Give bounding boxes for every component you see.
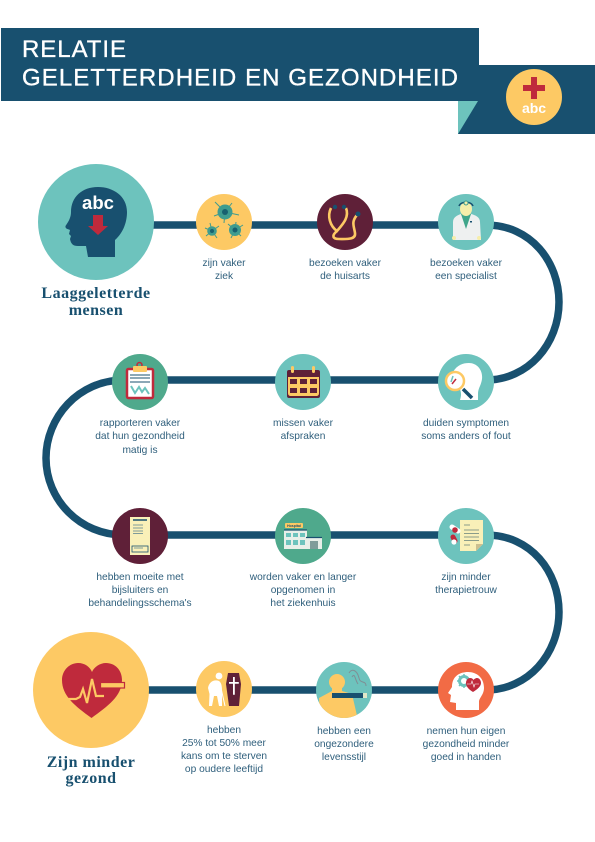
icon: magnifier over head bbox=[438, 354, 494, 410]
step: kans om te sterven bbox=[181, 661, 267, 775]
icon: hospital: Hospital bbox=[287, 524, 301, 528]
step: bezoeken vaker een specialist bbox=[430, 194, 503, 282]
label: matig is bbox=[122, 445, 158, 456]
icon: health and abc badge: abc bbox=[522, 100, 546, 116]
label: bijsluiters en bbox=[112, 585, 168, 596]
step: missen vaker afspraken bbox=[273, 354, 334, 442]
label: ziek bbox=[215, 271, 234, 282]
icon: health and abc badge bbox=[506, 69, 562, 125]
icon: bacteria bbox=[196, 194, 252, 250]
heading: Laaggeletterde bbox=[41, 285, 151, 302]
icon: doctor bbox=[438, 194, 494, 250]
icon: pills and prescription bbox=[438, 508, 494, 564]
step: ongezondere levensstijl bbox=[314, 662, 374, 763]
label: ongezondere bbox=[314, 739, 374, 750]
label: afspraken bbox=[281, 431, 325, 442]
step: bezoeken vaker de huisarts bbox=[309, 194, 382, 282]
heading: Zijn minder bbox=[47, 754, 135, 771]
label: op oudere leeftijd bbox=[185, 764, 263, 775]
label: zijn minder bbox=[441, 572, 491, 583]
label: opgenomen in bbox=[271, 585, 335, 596]
label: nemen hun eigen bbox=[427, 726, 505, 737]
icon: leaflet bbox=[112, 508, 168, 564]
label: hebben een bbox=[317, 726, 371, 737]
label: goed in handen bbox=[431, 752, 501, 763]
label: levensstijl bbox=[322, 752, 366, 763]
step: ziekenhuis bbox=[249, 508, 357, 609]
start: laaggeletterde mensen bbox=[38, 164, 154, 319]
label: het ziekenhuis bbox=[270, 598, 336, 609]
label: therapietrouw bbox=[435, 585, 498, 596]
step: duiden symptomen bbox=[421, 354, 511, 442]
title: RELATIE bbox=[22, 36, 126, 63]
icon: head with abc bbox=[38, 164, 154, 280]
label: bezoeken vaker bbox=[309, 258, 382, 269]
icon: head with abc: abc bbox=[82, 192, 114, 213]
label: gezondheid minder bbox=[423, 739, 510, 750]
label: hebben bbox=[207, 725, 241, 736]
label: soms anders of fout bbox=[421, 431, 511, 442]
label: behandelingsschema's bbox=[88, 598, 192, 609]
step: zijn vaker ziek bbox=[196, 194, 252, 282]
label: kans om te sterven bbox=[181, 751, 267, 762]
label: 25% tot 50% meer bbox=[182, 738, 267, 749]
label: rapporteren vaker bbox=[100, 418, 181, 429]
heading: mensen bbox=[69, 302, 123, 319]
label: bezoeken vaker bbox=[430, 258, 503, 269]
step: eigen gezondheid bbox=[423, 662, 510, 763]
step: bijsluiters bbox=[88, 508, 192, 609]
icon: calendar bbox=[275, 354, 331, 410]
heading: gezond bbox=[66, 770, 116, 787]
end: zijn minder gezond bbox=[33, 632, 149, 787]
icon: elderly person and coffin bbox=[196, 661, 252, 717]
icon: stethoscope bbox=[317, 194, 373, 250]
icon: clipboard bbox=[112, 354, 168, 410]
label: zijn vaker bbox=[202, 258, 246, 269]
label: missen vaker bbox=[273, 418, 334, 429]
label: hebben moeite met bbox=[96, 572, 184, 583]
title: GELETTERDHEID EN GEZONDHEID bbox=[22, 64, 458, 92]
icon: smoker bbox=[316, 662, 372, 720]
label: de huisarts bbox=[320, 271, 370, 282]
header banner bbox=[1, 28, 595, 134]
winding path bbox=[46, 225, 559, 690]
label: worden vaker en langer bbox=[249, 572, 357, 583]
label: dat hun gezondheid bbox=[95, 431, 185, 442]
label: een specialist bbox=[435, 271, 497, 282]
icon: heart with pulse bbox=[33, 632, 149, 748]
label: duiden symptomen bbox=[423, 418, 509, 429]
step: therapietrouw bbox=[435, 508, 498, 596]
step: rapporteren vaker bbox=[95, 354, 185, 456]
icon: head with gear and heart bbox=[438, 662, 494, 718]
